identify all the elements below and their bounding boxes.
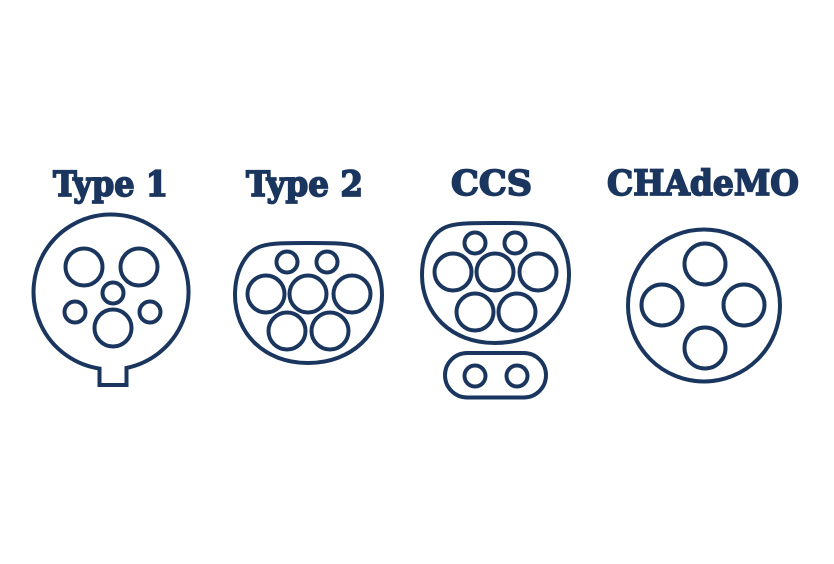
- panel: CCS connector: [422, 163, 569, 398]
- icon: CHAdeMO plug: [628, 230, 780, 382]
- icon: CCS plug: [422, 223, 569, 398]
- icon: Type 1 plug: [34, 214, 189, 385]
- heading: CHAdeMO: CHAdeMO: [607, 163, 799, 204]
- heading: Type 2: Type 2: [246, 164, 363, 205]
- panel: Type 1 connector: [34, 164, 189, 385]
- panel: CHAdeMO connector: [607, 163, 799, 382]
- heading: CCS: CCS: [451, 163, 532, 204]
- icon: Type 2 plug: [235, 243, 382, 363]
- heading: Type 1: Type 1: [53, 164, 168, 205]
- panel: Type 2 connector: [235, 164, 382, 363]
